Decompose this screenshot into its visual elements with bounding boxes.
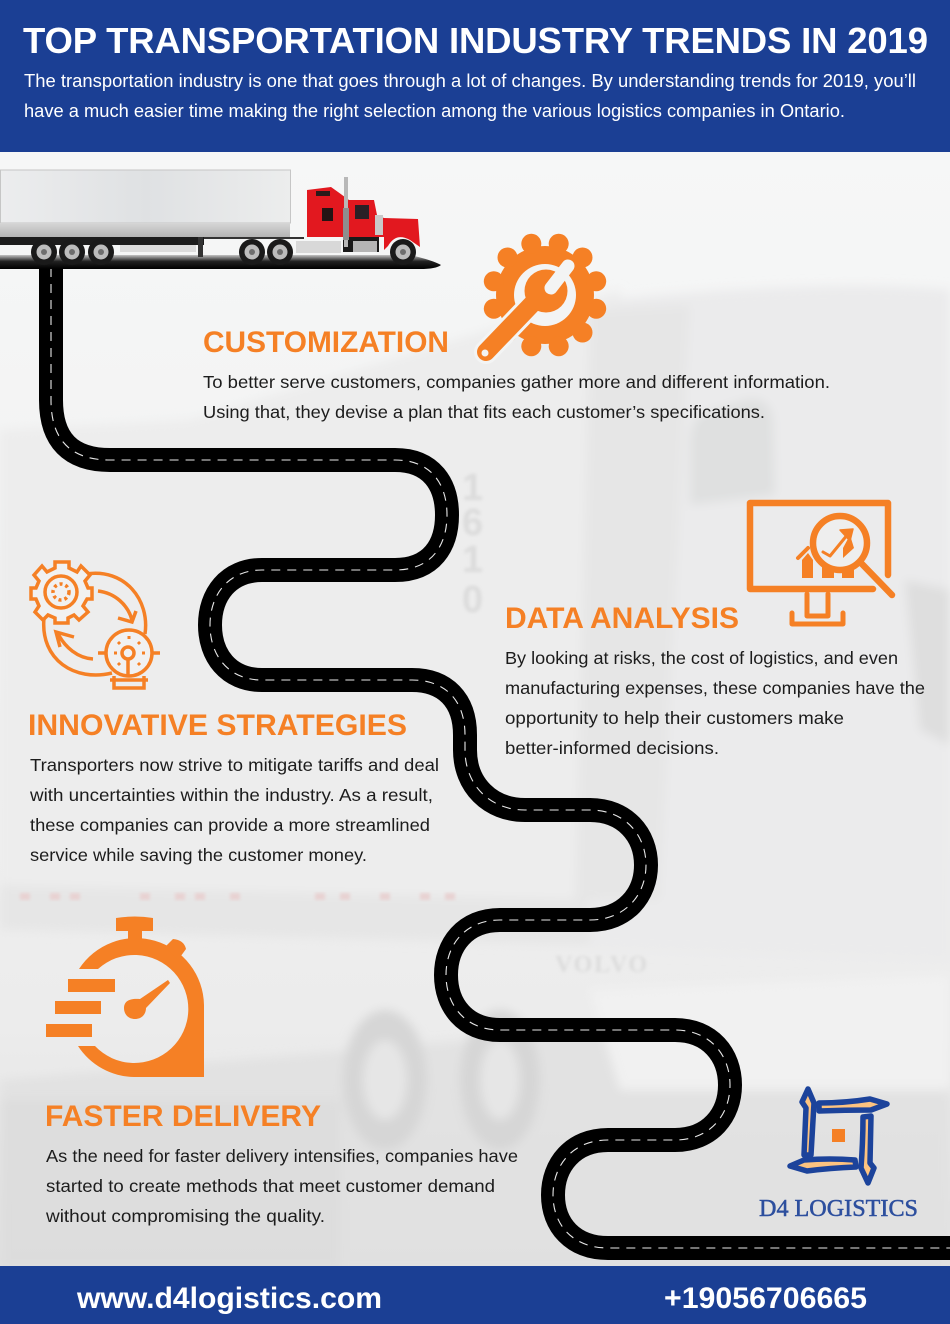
body text: with uncertainties within the industry. As a result, — [29, 785, 433, 805]
phone: +19056706665 — [664, 1282, 867, 1315]
body text: started to create methods that meet customer demand — [46, 1176, 495, 1196]
body text: service while saving the customer money. — [30, 845, 367, 865]
intro text: have a much easier time making the right selection among the various logistics companies in Ontario. — [24, 101, 845, 121]
icon: monitor with magnifier — [750, 503, 892, 624]
body text: To better serve customers, companies gather more and different information. — [203, 372, 830, 392]
body text — [203, 372, 830, 422]
title: TOP TRANSPORTATION INDUSTRY TRENDS IN 2019 — [23, 20, 928, 61]
logo mark — [790, 1089, 887, 1183]
heading: CUSTOMIZATION — [203, 326, 449, 359]
intro text: The transportation industry is one that goes through a lot of changes. By understanding trends for 2019, you’ll — [24, 71, 916, 91]
body text: better-informed decisions. — [505, 738, 719, 758]
panel: innovative strategies — [28, 709, 439, 865]
heading: INNOVATIVE STRATEGIES — [28, 709, 407, 742]
trailer — [0, 170, 304, 257]
ground shadow — [0, 255, 441, 269]
body text: By looking at risks, the cost of logistics, and even — [505, 648, 898, 668]
red cab — [296, 177, 420, 253]
body text: these companies can provide a more streamlined — [30, 815, 430, 835]
body text: opportunity to help their customers make — [505, 708, 844, 728]
header band — [0, 0, 950, 152]
page background with faded truck photo: 6 — [462, 502, 483, 544]
icon: gear and light bulb cycle — [31, 562, 160, 688]
winding road — [51, 268, 950, 1248]
page background with faded truck photo: 1 — [462, 467, 483, 509]
body text: As the need for faster delivery intensifies, companies have — [46, 1146, 518, 1166]
logo: D4 Logistics — [759, 1089, 918, 1222]
page background with faded truck photo: VOLVO — [555, 952, 647, 978]
body text: manufacturing expenses, these companies have the — [505, 678, 925, 698]
body text — [505, 648, 925, 758]
wheels — [31, 239, 416, 265]
panel: data analysis — [505, 602, 925, 758]
body text — [45, 1146, 518, 1226]
body text — [29, 755, 439, 865]
panel: customization — [203, 326, 830, 422]
heading: DATA ANALYSIS — [505, 602, 739, 635]
footer band — [0, 1266, 950, 1324]
body text: Using that, they devise a plan that fits each customer’s specifications. — [203, 402, 765, 422]
intro text — [24, 71, 916, 121]
page background with faded truck photo: 1 — [462, 539, 483, 581]
icon: gear with wrench — [482, 234, 606, 356]
heading: FASTER DELIVERY — [45, 1100, 321, 1133]
logo wordmark: D4 LOGISTICS — [759, 1196, 918, 1222]
panel: faster delivery — [45, 1100, 518, 1226]
body text: Transporters now strive to mitigate tariffs and deal — [30, 755, 439, 775]
truck illustration — [0, 170, 441, 269]
website: www.d4logistics.com — [76, 1282, 382, 1315]
page background with faded truck photo — [0, 306, 950, 1266]
page background with faded truck photo: 0 — [462, 579, 483, 621]
icon: stopwatch — [46, 916, 204, 1077]
body text: without compromising the quality. — [45, 1206, 325, 1226]
